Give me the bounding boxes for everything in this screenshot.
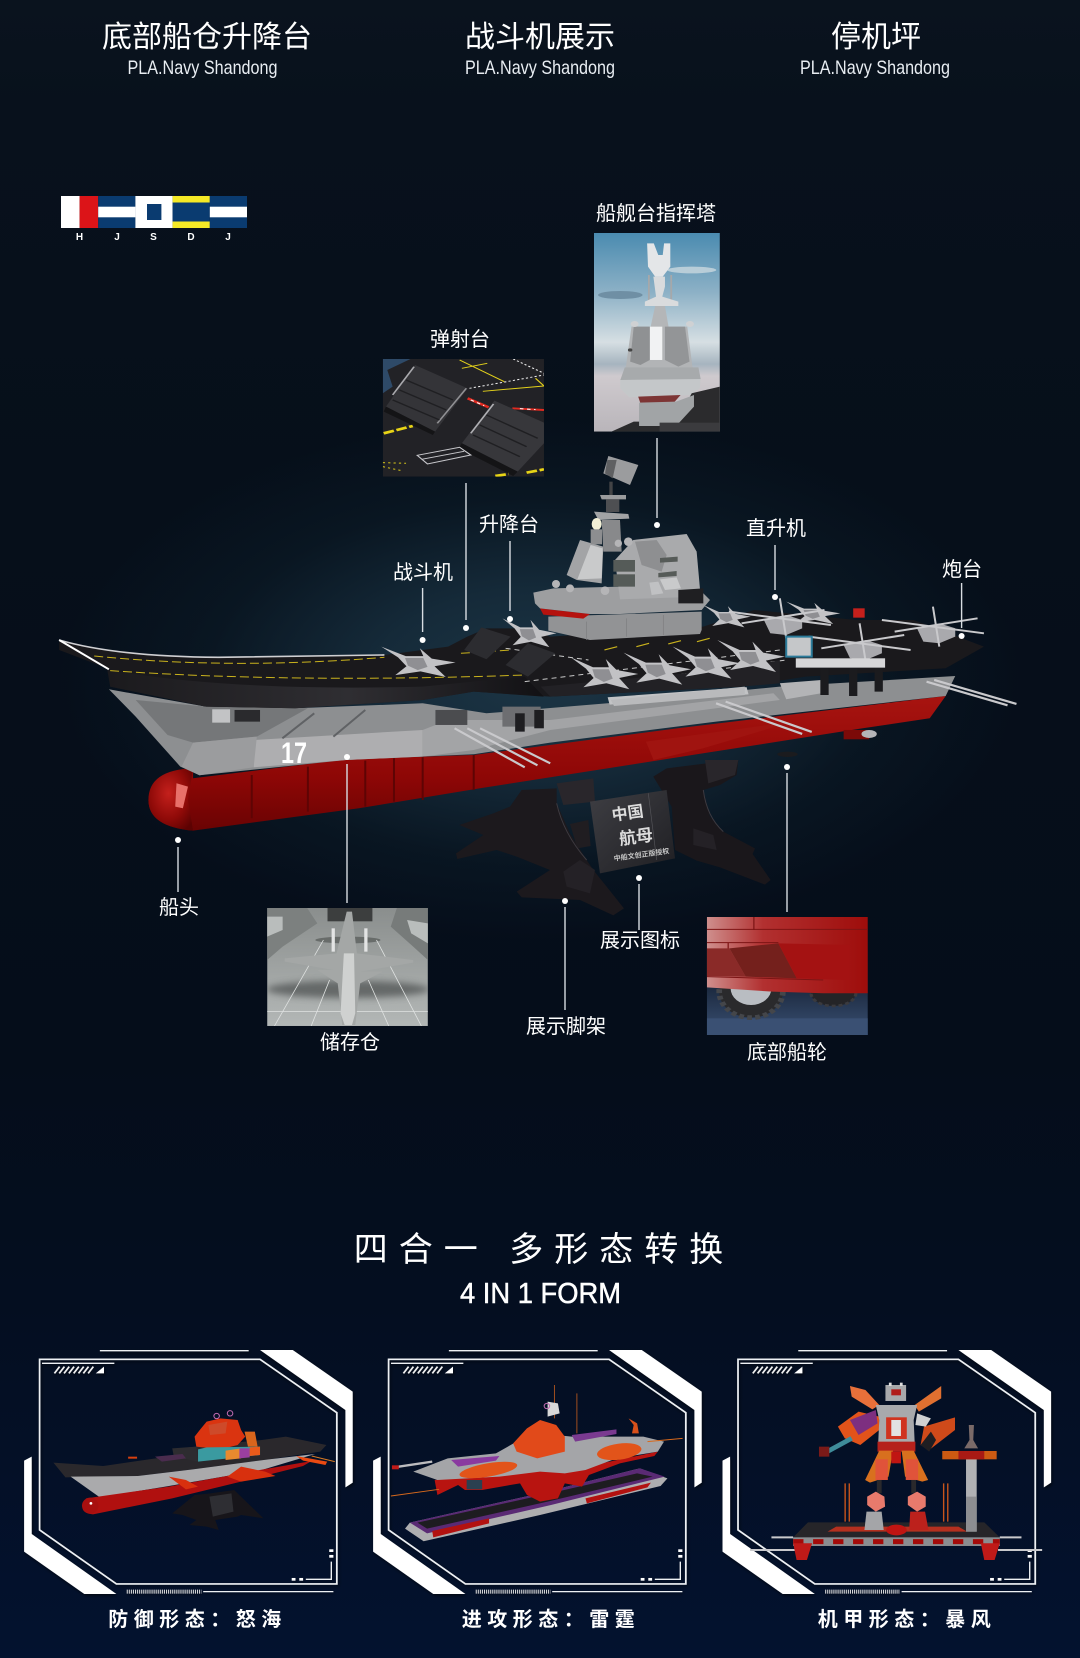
flight deck [59, 610, 984, 708]
label: fighter: 战斗机 [393, 561, 453, 584]
label: elevator: 升降台 [479, 513, 539, 536]
heading: flight deck: PLA.Navy Shandong [800, 57, 950, 79]
caption: 防御形态：怒海 [108, 1603, 287, 1632]
sign text: 航母 [618, 824, 654, 849]
stand sign [590, 790, 675, 873]
label: bow: 船头 [159, 896, 199, 919]
photo: bottom wheel [707, 917, 868, 1035]
section title: 四合一 多形态转换 [354, 1231, 734, 1269]
main model: aircraft carrier [59, 598, 1016, 831]
label: fighter [393, 561, 453, 643]
heading: fighter display: 战斗机展示 [465, 21, 615, 54]
label: elevator [479, 513, 539, 622]
label: gun: 炮台 [942, 558, 982, 581]
leader: tower [654, 438, 660, 528]
mini model: attack ship [391, 1385, 683, 1541]
label: sign: 展示图标 [600, 929, 680, 952]
photo: bridge tower [594, 233, 720, 432]
sign text: 中船文创正版授权 [613, 846, 670, 863]
mini model: mecha robot [750, 1383, 1042, 1560]
panel: attack form [373, 1350, 702, 1632]
heading: lift platform: 底部船仓升降台 [102, 21, 312, 54]
photo: catapult [383, 359, 544, 477]
deck lifts and fittings [235, 608, 885, 732]
label: stand: 展示脚架 [526, 1015, 606, 1038]
heading: lift platform [102, 21, 312, 79]
icon: signal flags HJSDJ: H [76, 232, 83, 243]
label: storage: 储存仓 [320, 1031, 380, 1054]
heading: flight deck [800, 21, 950, 79]
panel: defense form [24, 1350, 353, 1632]
frame [373, 1350, 702, 1594]
icon: signal flags HJSDJ: D [187, 232, 195, 243]
mini model: carrier [53, 1411, 335, 1530]
label: sign [600, 875, 680, 952]
label: wheel: 底部船轮 [747, 1041, 827, 1064]
label: catapult: 弹射台 [430, 328, 490, 351]
icon: signal flags HJSDJ: J [114, 232, 120, 243]
icon: signal flags HJSDJ: S [150, 232, 157, 243]
icon: signal flags HJSDJ: J [225, 232, 231, 243]
label: stand [526, 898, 606, 1038]
section subtitle: 4 IN 1 FORM [460, 1278, 621, 1310]
leader: storage [344, 754, 350, 903]
photo: storage bay [266, 908, 430, 1026]
label: helicopter [746, 517, 806, 600]
label: bow [159, 837, 199, 919]
leader: catapult [463, 483, 469, 631]
grey hull [109, 676, 955, 775]
leader: wheel [784, 764, 790, 912]
sign text [607, 800, 670, 863]
caption: 进攻形态：雷霆 [462, 1603, 640, 1632]
label: gun [942, 558, 982, 639]
heading: fighter display [465, 21, 615, 79]
label: bridge tower: 船舰台指挥塔 [596, 202, 716, 225]
superstructure island [533, 456, 710, 640]
frame [723, 1350, 1051, 1594]
heading: flight deck: 停机坪 [831, 21, 921, 54]
display stand [456, 760, 771, 915]
frame [24, 1350, 353, 1594]
icon: signal flags HJSDJ [61, 196, 247, 243]
catapult ramps [464, 627, 555, 677]
label: helicopter: 直升机 [746, 517, 806, 540]
sign text: 中国 [611, 802, 645, 825]
hull number 17: 17 [281, 737, 307, 770]
aircraft on deck [381, 598, 984, 689]
caption: 机甲形态：暴风 [818, 1603, 996, 1632]
panel: mecha form [723, 1350, 1051, 1632]
heading: lift platform: PLA.Navy Shandong [128, 57, 278, 79]
red hull [148, 696, 946, 831]
heading: fighter display: PLA.Navy Shandong [465, 57, 615, 79]
deck guns [455, 680, 1016, 767]
